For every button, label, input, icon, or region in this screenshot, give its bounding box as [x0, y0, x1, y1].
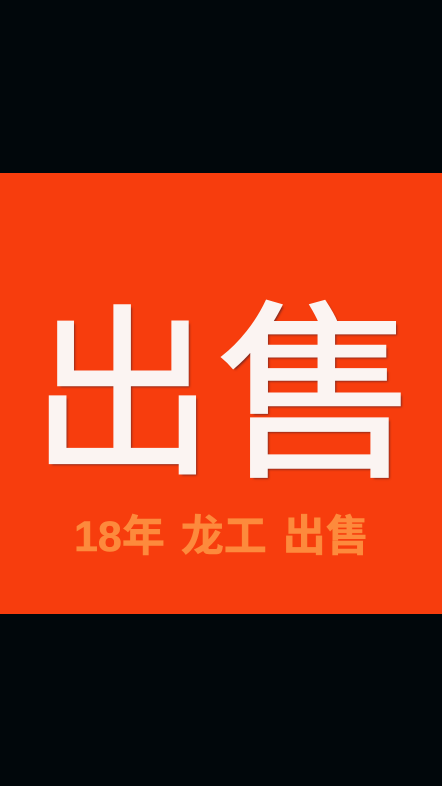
top black band — [0, 0, 442, 173]
heading: sale character two: 售 — [216, 290, 419, 502]
subtitle text: 18年 龙工 出售 — [74, 513, 369, 561]
panel: orange red sale panel — [0, 173, 442, 614]
heading: sale character one: 出 — [31, 293, 214, 498]
bottom black band — [0, 614, 442, 786]
